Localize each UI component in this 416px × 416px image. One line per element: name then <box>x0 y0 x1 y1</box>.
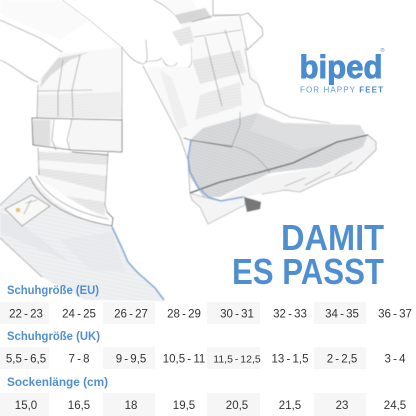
row: sock length: 21,5 <box>279 400 301 412</box>
heading <box>232 217 384 292</box>
row: EU sizes: 36 - 37 <box>378 308 412 320</box>
boot top band <box>192 15 247 106</box>
registered mark: ® <box>380 47 385 54</box>
row: UK sizes: 3 - 4 <box>384 354 406 366</box>
logo wordmark: biped <box>300 49 382 85</box>
logo tagline: FOR HAPPY FEET <box>300 86 383 94</box>
row: EU sizes: 22 - 23 <box>9 308 43 320</box>
sock body <box>0 177 165 301</box>
heading: ES PASST <box>232 251 384 292</box>
sock cuff seam <box>30 177 113 226</box>
rear collar line <box>184 138 232 147</box>
illustration: left leg with sock <box>0 0 165 301</box>
illustration: right leg with boot <box>143 0 376 224</box>
arm and trouser leg <box>0 0 90 40</box>
folded cuff <box>32 118 122 152</box>
row: UK sizes: 2 - 2,5 <box>327 354 357 366</box>
boot stripes <box>175 8 212 24</box>
row: sock length: 19,5 <box>173 400 195 412</box>
boot shaft <box>145 0 265 193</box>
row: sock length: 16,5 <box>68 400 90 412</box>
heading: EU sizes: Schuhgröße (EU) <box>7 285 99 297</box>
logo: biped <box>300 47 385 94</box>
row: EU sizes: 30 - 31 <box>220 308 254 320</box>
panel: size table <box>0 285 412 416</box>
dark welt line <box>190 135 368 193</box>
sock label tag <box>5 195 50 226</box>
illustration: hands <box>63 0 263 69</box>
row: EU sizes: 26 - 27 <box>114 308 148 320</box>
row: sock length <box>15 400 406 412</box>
row: UK sizes: 11,5 - 12,5 <box>213 354 261 366</box>
heel block <box>190 193 261 224</box>
row: sock length: 15,0 <box>15 400 37 412</box>
row: UK sizes: 7 - 8 <box>68 354 90 366</box>
row: EU sizes: 34 - 35 <box>325 308 359 320</box>
row: UK sizes: 13 - 1,5 <box>272 354 308 366</box>
table cell backgrounds <box>0 302 366 416</box>
row: UK sizes: 10,5 - 11 <box>163 354 205 366</box>
row: EU sizes: 28 - 29 <box>167 308 201 320</box>
row: sock length: 20,5 <box>226 400 248 412</box>
heading: UK sizes: Schuhgröße (UK) <box>7 331 100 343</box>
row: EU sizes: 32 - 33 <box>273 308 307 320</box>
row: EU sizes: 24 - 25 <box>62 308 96 320</box>
blue stitch on boot <box>188 140 243 201</box>
lower leg stripes <box>38 150 113 225</box>
row: UK sizes: 5,5 - 6,5 <box>6 354 46 366</box>
boot sole <box>220 135 376 200</box>
row: sock length: 24,5 <box>384 400 406 412</box>
row: sock length: 18 <box>125 400 137 412</box>
heading: sock length: Sockenlänge (cm) <box>7 377 108 389</box>
sock inside boot <box>188 113 367 197</box>
row: EU sizes <box>9 308 412 320</box>
row: UK sizes <box>6 354 406 366</box>
blue stitch on sock <box>112 227 164 300</box>
heading: DAMIT <box>281 217 384 258</box>
row: UK sizes: 9 - 9,5 <box>116 354 146 366</box>
row: sock length: 23 <box>336 400 348 412</box>
